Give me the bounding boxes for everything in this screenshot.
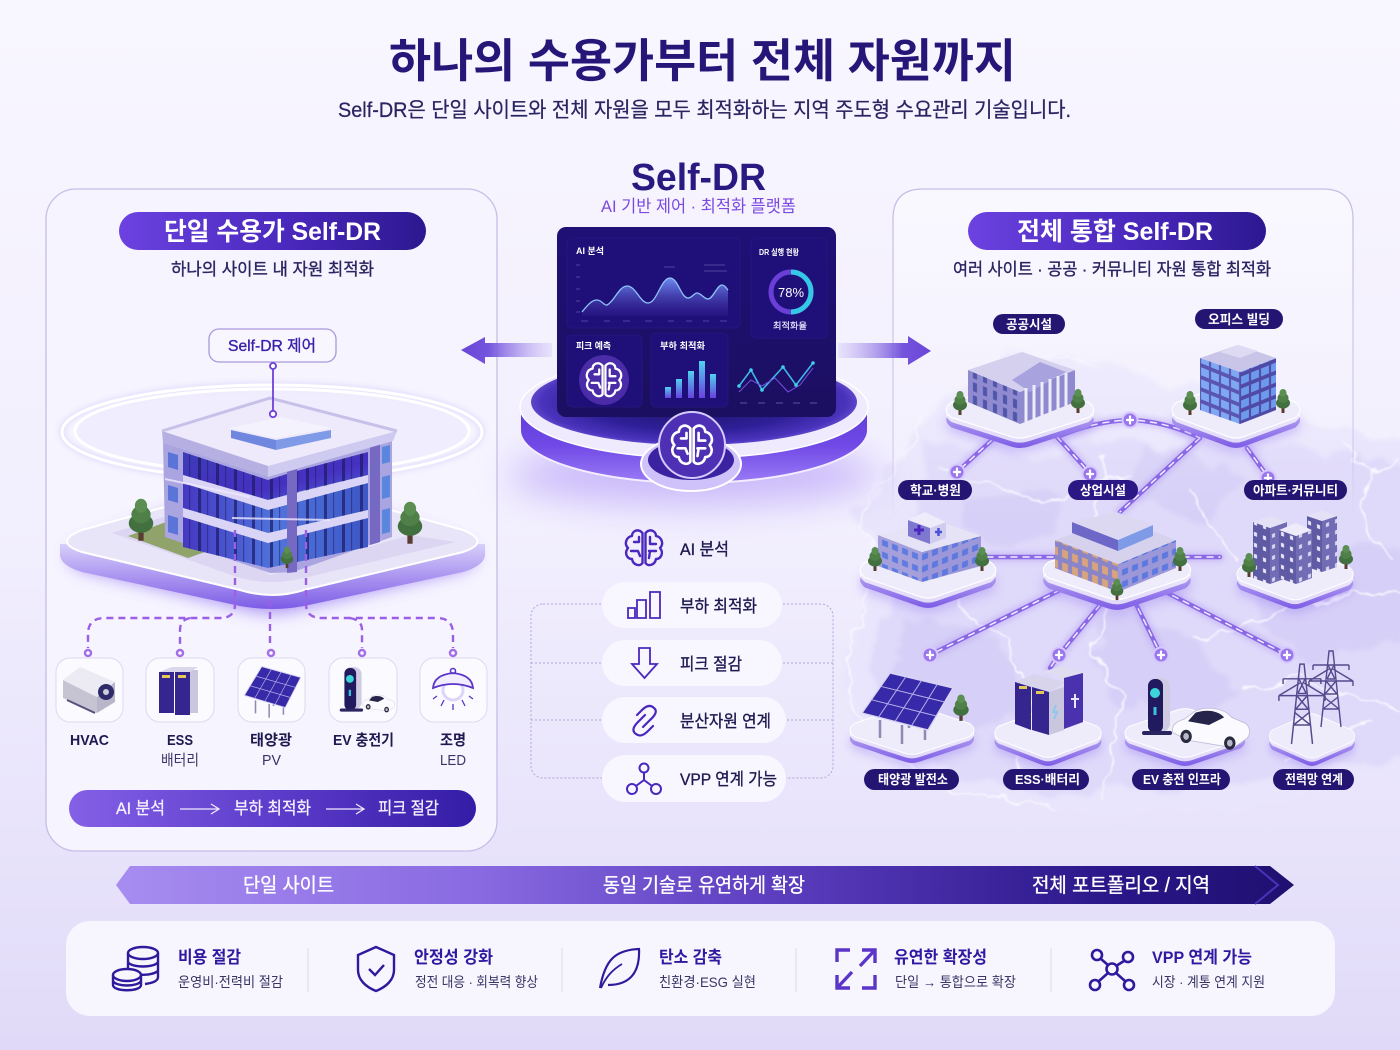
function: VPP link: VPP 연계 가능: [680, 770, 777, 789]
panel subheading: 여러 사이트 · 공공 · 커뮤니티 자원 통합 최적화: [953, 260, 1271, 279]
site label: commercial: 상업시설: [1080, 483, 1126, 498]
building walls: [163, 438, 392, 573]
resource site: solar plant: [850, 673, 974, 766]
resource label: ESS battery: ESS·배터리: [1015, 772, 1080, 787]
site label: school and hospital: 학교·병원: [910, 483, 961, 498]
dashboard: AI analysis chart: [567, 238, 740, 328]
resource: EV charger: EV 충전기: [333, 732, 394, 749]
benefit: carbon reduction: 탄소 감축: [659, 948, 722, 967]
dashboard: peak prediction: 피크 예측: [576, 340, 611, 351]
site label: school and hospital: [898, 480, 972, 500]
function: AI analysis: AI 분석: [680, 540, 729, 559]
process bar: 부하 최적화: [234, 799, 311, 818]
site: school and hospital: [860, 512, 996, 612]
center heading: [601, 157, 796, 216]
benefit: VPP link: [1090, 948, 1265, 990]
resource: HVAC: [56, 658, 123, 749]
trees: [129, 499, 422, 568]
scale band arrow: 동일 기술로 유연하게 확장: [603, 874, 805, 897]
benefit: carbon reduction: [600, 948, 756, 990]
resource label: ESS battery: [1003, 769, 1089, 790]
center heading: Self-DR: [631, 157, 766, 199]
benefit: VPP link: VPP 연계 가능: [1152, 948, 1252, 967]
benefit: cost saving: 비용 절감: [178, 948, 241, 967]
resource label: EV charging: [1132, 769, 1230, 790]
dashboard: load optimization bars: [651, 333, 728, 407]
benefit: cost saving: [113, 947, 283, 990]
map of region background: [846, 355, 1400, 815]
dashboard: load optimization bars: 부하 최적화: [660, 340, 706, 351]
function: distributed resources: [602, 697, 786, 743]
benefit: scalability: 유연한 확장성: [894, 948, 987, 967]
resource: lighting: 조명: [440, 732, 466, 749]
subtitle: Self-DR은 단일 사이트와 전체 자원을 모두 최적화하는 지역 주도형 수요관리 기술입니다.: [338, 99, 1071, 122]
dashboard: peak prediction: [567, 335, 642, 407]
function: peak reduction: 피크 절감: [680, 655, 742, 674]
process bar: AI 분석: [116, 799, 165, 818]
scale band arrow: 전체 포트폴리오 / 지역: [1032, 874, 1210, 897]
resource: HVAC: HVAC: [70, 732, 109, 749]
resource: solar PV: [238, 658, 305, 769]
resource label: solar plant: [864, 769, 959, 790]
control connector line: [270, 363, 276, 417]
connector dots: [85, 650, 456, 656]
benefit: stability: 정전 대응 · 회복력 향상: [415, 974, 538, 990]
site: commercial hub: [1043, 512, 1191, 614]
site label: public facility: 공공시설: [1006, 317, 1052, 332]
site label: office building: [1195, 309, 1283, 329]
resource: ESS: 배터리: [161, 752, 199, 769]
resource label: solar plant: 태양광 발전소: [878, 772, 948, 787]
center subheading: AI 기반 제어 · 최적화 플랫폼: [601, 197, 796, 216]
function connector frame: [531, 604, 833, 778]
scale band arrow: [116, 866, 1294, 904]
benefit: carbon reduction: 친환경·ESG 실현: [659, 974, 756, 990]
benefit: cost saving: 운영비·전력비 절감: [178, 974, 283, 990]
site label: office building: 오피스 빌딩: [1208, 312, 1270, 327]
arrow: to integrated portfolio: [838, 336, 931, 365]
resource: solar PV: PV: [262, 752, 281, 769]
benefit: stability: 안정성 강화: [414, 948, 493, 967]
resource: ESS: [146, 658, 214, 769]
function: VPP link: [602, 755, 786, 802]
resource label: power grid: [1273, 769, 1354, 790]
resource: EV charger: [329, 658, 397, 749]
site label: public facility: [993, 314, 1065, 334]
resource label: EV charging: EV 충전 인프라: [1143, 772, 1221, 787]
function: load optimization: [602, 582, 782, 628]
benefit: scalability: 단일 → 통합으로 확장: [895, 974, 1016, 990]
dashed connectors to resources: [88, 530, 453, 648]
panel heading pill: 전체 통합 Self-DR: [1017, 218, 1213, 246]
function: load optimization: 부하 최적화: [680, 597, 757, 616]
panel subheading: 하나의 사이트 내 자원 최적화: [171, 260, 374, 279]
building roof: [162, 398, 397, 477]
resource: ESS: ESS: [167, 732, 193, 749]
resource site: power grid: [1269, 651, 1355, 769]
panel heading pill: 단일 수용가 Self-DR: [164, 218, 381, 246]
dashboard: AI analysis chart: AI 분석: [576, 246, 604, 256]
network nodes: [922, 412, 1294, 662]
central platform disc: [509, 356, 879, 505]
network links: [930, 420, 1287, 668]
control label: [209, 329, 336, 362]
process bar: 피크 절감: [378, 799, 439, 818]
benefit: scalability: [837, 948, 1016, 990]
panel: integrated Self-DR: [850, 189, 1355, 790]
panel: single customer Self-DR: [46, 189, 497, 851]
panel heading pill: [119, 212, 426, 250]
site: apartments: [1237, 510, 1353, 612]
site label: commercial: [1068, 480, 1138, 500]
control label: Self-DR 제어: [228, 337, 316, 355]
benefit: VPP link: 시장 · 계통 연계 지원: [1152, 974, 1265, 990]
title: 하나의 수용가부터 전체 자원까지: [389, 35, 1016, 87]
site: office building: [1172, 345, 1300, 452]
arrow: to single customer: [461, 337, 552, 364]
process bar: [69, 790, 476, 827]
site label: apartments: [1244, 480, 1347, 500]
dashboard: DR status donut: [751, 238, 827, 338]
benefit: stability: [358, 947, 538, 991]
dashboard: DR status donut: DR 실행 현황: [759, 247, 800, 257]
dashboard: trend line chart: [737, 361, 817, 403]
resource label: power grid: 전력망 연계: [1285, 772, 1343, 787]
resource site: ESS battery: [995, 666, 1101, 769]
dashboard: DR status donut: 최적화율: [773, 320, 807, 331]
dashboard screen: [557, 227, 836, 417]
function: distributed resources: 분산자원 연계: [680, 712, 771, 731]
scale band arrow: 단일 사이트: [243, 874, 334, 897]
dashboard: DR status donut: 78%: [778, 285, 804, 300]
panel heading pill: [968, 212, 1266, 250]
resource: lighting: [420, 658, 487, 769]
isometric building with platform: [60, 398, 485, 613]
site label: apartments: 아파트·커뮤니티: [1253, 483, 1338, 498]
resource: solar PV: 태양광: [250, 732, 292, 749]
function: AI analysis: [626, 530, 729, 565]
energy rings around building: [62, 385, 482, 479]
site: public facility: [946, 352, 1094, 452]
resource site: EV charging: [1125, 678, 1250, 769]
function: peak reduction: [602, 640, 782, 686]
benefits card: [66, 921, 1335, 1016]
central brain badge: [641, 412, 741, 491]
resource: lighting: LED: [440, 752, 466, 769]
